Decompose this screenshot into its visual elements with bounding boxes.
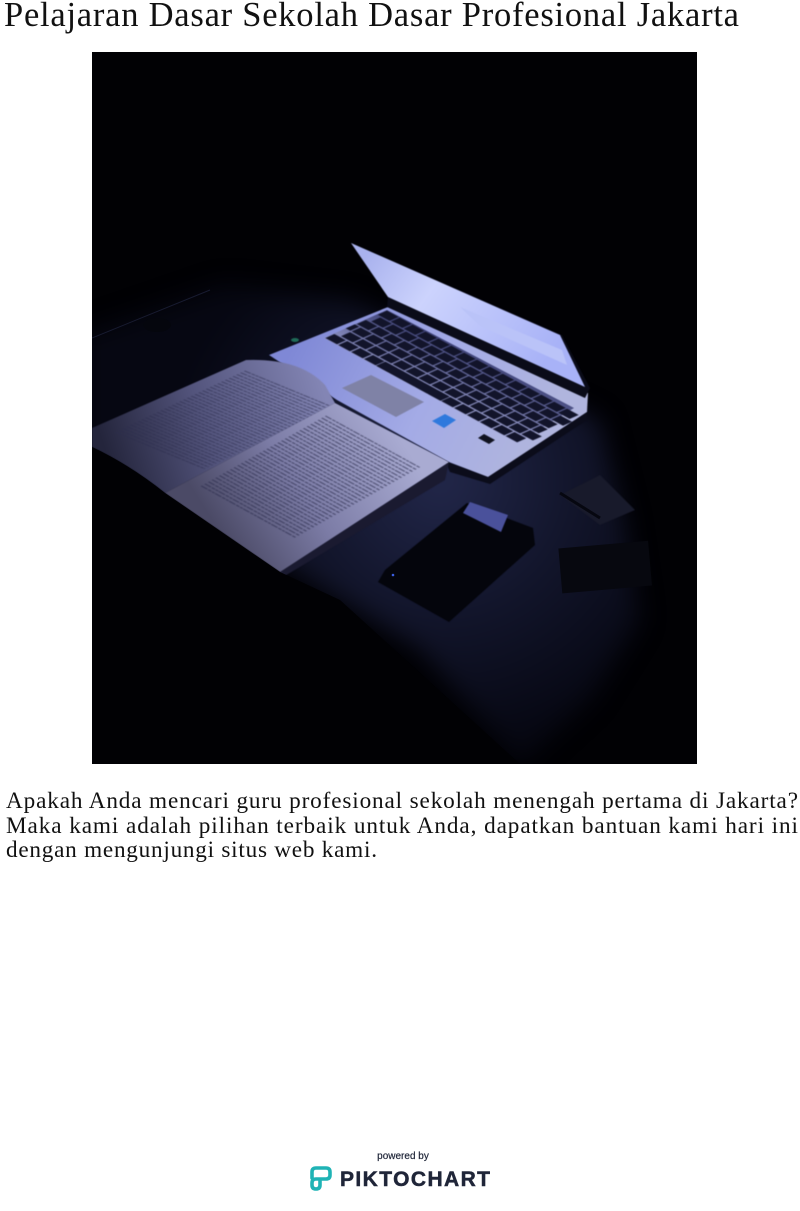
green light — [291, 338, 299, 342]
smartphone — [378, 502, 535, 622]
body text: Apakah Anda mencari guru profesional sekolah menengah pertama di Jakarta? — [6, 788, 798, 814]
phone screen reflection — [463, 502, 508, 532]
photo: laptop and open book on a dark desk — [92, 52, 697, 764]
powered by label: powered by — [377, 1151, 429, 1162]
fingerprint reader — [478, 434, 495, 444]
footer logo: powered by Piktochart — [310, 1151, 490, 1191]
keyboard — [324, 310, 585, 446]
open book — [92, 360, 449, 580]
body text: dengan mengunjungi situs web kami. — [6, 837, 377, 863]
laptop base — [269, 307, 588, 477]
book edge — [278, 462, 449, 580]
desk objects — [558, 475, 652, 593]
screen — [351, 243, 585, 387]
desk surface — [80, 285, 640, 764]
body text: Maka kami adalah pilihan terbaik untuk Anda, dapatkan bantuan kami hari ini — [6, 813, 798, 839]
laptop — [269, 243, 590, 484]
icon: Piktochart P mark — [312, 1168, 330, 1189]
touchpad — [342, 375, 424, 417]
wordmark: PIKTOCHART — [340, 1168, 490, 1191]
left page — [92, 360, 335, 493]
sticker — [432, 414, 456, 428]
right page — [165, 403, 449, 572]
dark foreground — [92, 447, 520, 764]
body text — [6, 788, 798, 863]
screen back bezel — [351, 243, 590, 398]
